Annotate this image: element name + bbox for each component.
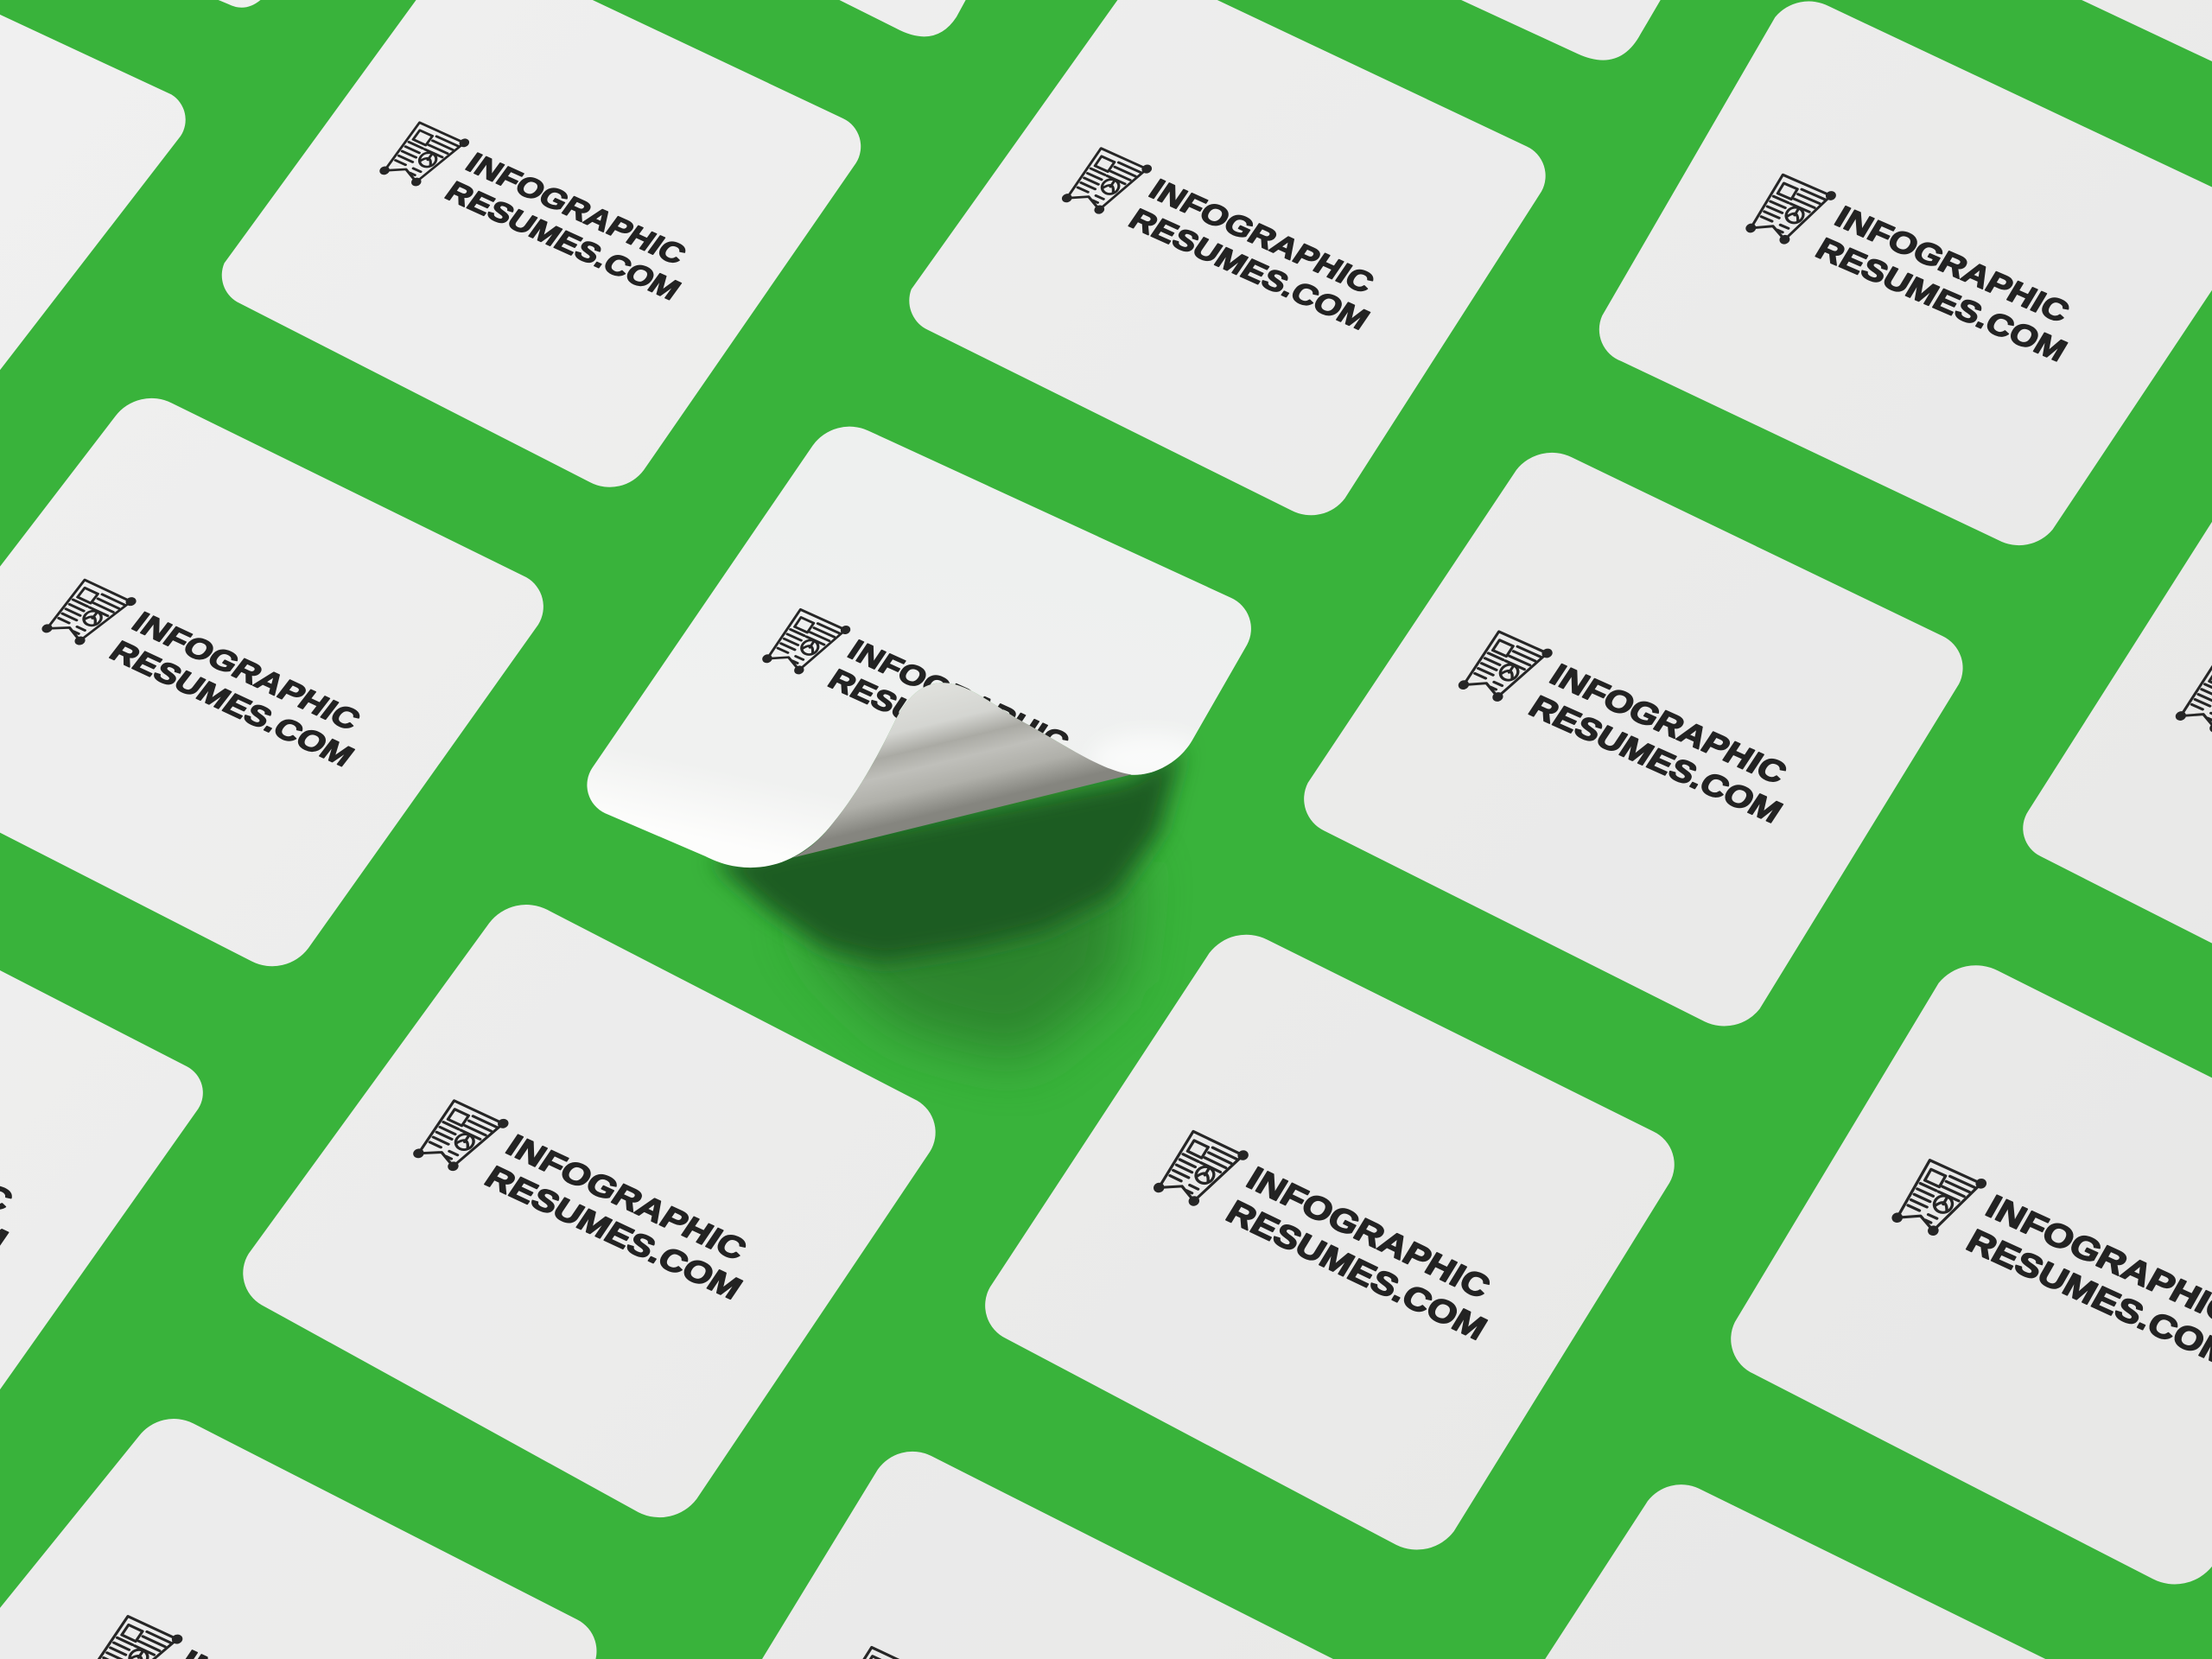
sticker: row 3 far left — [0, 927, 203, 1510]
top edge sticker corner 4 — [2067, 0, 2212, 96]
logo: RESUMES.COM — [1122, 204, 1375, 336]
logo: RESUMES.COM — [439, 176, 687, 306]
logo — [411, 1096, 770, 1306]
sticker: row 3 middle — [985, 935, 1675, 1550]
logo: INFOGRAPHIC — [499, 1128, 753, 1267]
logo — [1890, 1155, 2212, 1374]
logo: INFOGRAPHIC — [1240, 1161, 1497, 1306]
sticker: row 1 middle — [909, 0, 1546, 515]
logo: RESUMES.COM — [1961, 1223, 2212, 1374]
sticker: peeled centre — [587, 427, 1251, 868]
logo: INFOGRAPHIC — [460, 148, 692, 270]
logo: INFOGRAPHIC — [1143, 174, 1380, 300]
sticker: row 3 right — [1731, 965, 2212, 1584]
sticker: row 2 far right — [2023, 406, 2212, 981]
logo — [87, 1611, 429, 1659]
peeled sticker shadow — [712, 747, 1182, 1061]
logo icon — [832, 1643, 927, 1659]
logo — [1152, 1127, 1514, 1347]
logo: INFOGRAPHIC — [125, 607, 366, 736]
logo: INFOGRAPHIC — [842, 634, 1075, 759]
logo: RESUMES.COM — [1522, 690, 1789, 830]
sticker: row 4 right — [1543, 1484, 2051, 1659]
logo: INFOGRAPHIC — [1980, 1189, 2212, 1332]
sticker: row 3 left — [243, 905, 936, 1517]
logo: RESUMES.COM — [822, 664, 1071, 795]
top edge sticker corner 3 — [1446, 0, 1665, 60]
sticker: row 4 left — [0, 1419, 596, 1659]
sticker: row 2 right — [1304, 453, 1963, 1026]
logo: RESUMES.COM — [1220, 1194, 1492, 1347]
sticker: row 1 right — [1599, 2, 2212, 545]
peeled underside — [793, 683, 1131, 858]
logo — [40, 575, 384, 772]
logo — [762, 608, 1068, 741]
logo: RESUMES.COM — [103, 635, 360, 772]
logo — [2174, 658, 2212, 861]
sticker: row 1 left — [222, 0, 861, 487]
logo — [1744, 170, 2093, 368]
sticker: far left row 1 — [0, 0, 186, 480]
logo — [0, 1047, 36, 1257]
sticker: row 2 left — [0, 398, 543, 966]
logo: INFOGRAPHIC — [1544, 658, 1793, 791]
logo — [378, 118, 709, 306]
top edge sticker corner 2 — [825, 0, 974, 36]
top edge sticker corner 1 — [212, 0, 270, 8]
logo — [1457, 627, 1810, 830]
logo: INFOGRAPHIC — [1829, 200, 2075, 329]
lobe highlight — [1108, 737, 1194, 775]
logo: RESUMES.COM — [1810, 231, 2073, 368]
sticker: row 4 middle — [760, 1452, 1338, 1659]
logo — [1060, 144, 1396, 336]
logo: RESUMES.COM — [479, 1159, 749, 1306]
